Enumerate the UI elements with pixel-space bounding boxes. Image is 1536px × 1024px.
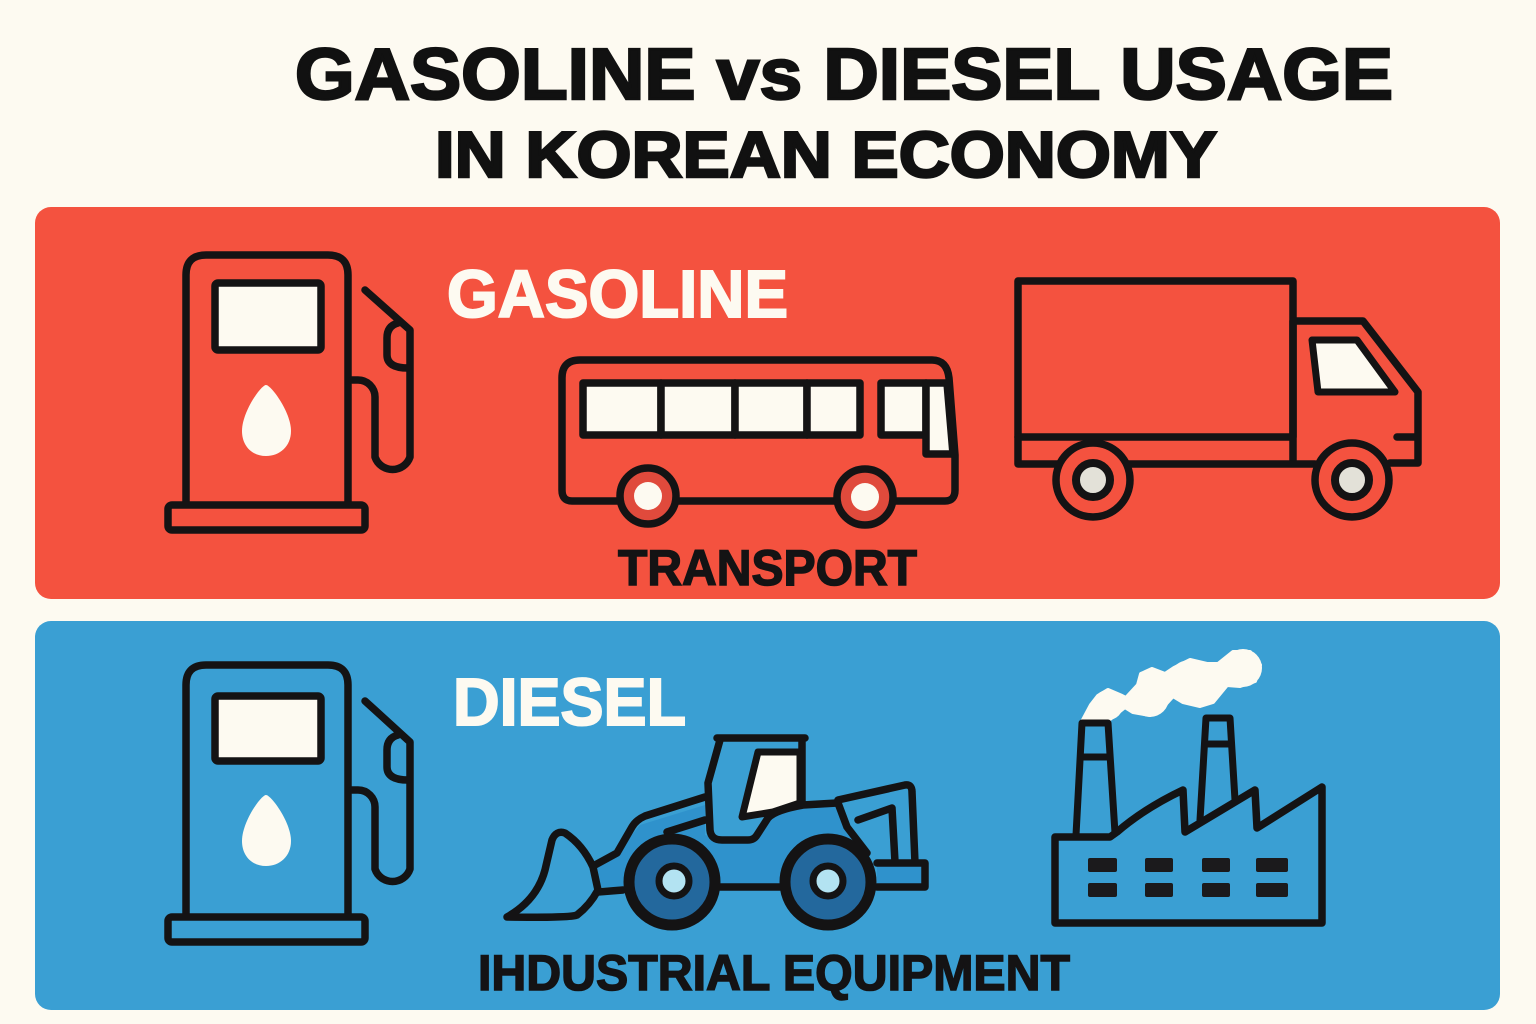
icon: truck (1018, 281, 1418, 517)
icon: gasoline pump (168, 255, 410, 530)
label: transport: TRANSPORT (618, 540, 917, 596)
panel: diesel (35, 621, 1500, 1010)
title: IN KOREAN ECONOMY (435, 118, 1217, 191)
title: GASOLINE vs DIESEL USAGE (295, 35, 1393, 115)
panel: gasoline (35, 207, 1500, 599)
title (295, 35, 1393, 191)
icon: diesel pump (168, 665, 410, 942)
icon: bus (562, 360, 955, 525)
icon: factory (1055, 649, 1322, 923)
icon: wheel loader (507, 738, 925, 925)
heading: diesel: DIESEL (453, 665, 686, 740)
smoke (1083, 649, 1262, 720)
label: industrial equipment: IHDUSTRIAL EQUIPMENT (478, 945, 1070, 1001)
heading: gasoline: GASOLINE (447, 257, 788, 332)
